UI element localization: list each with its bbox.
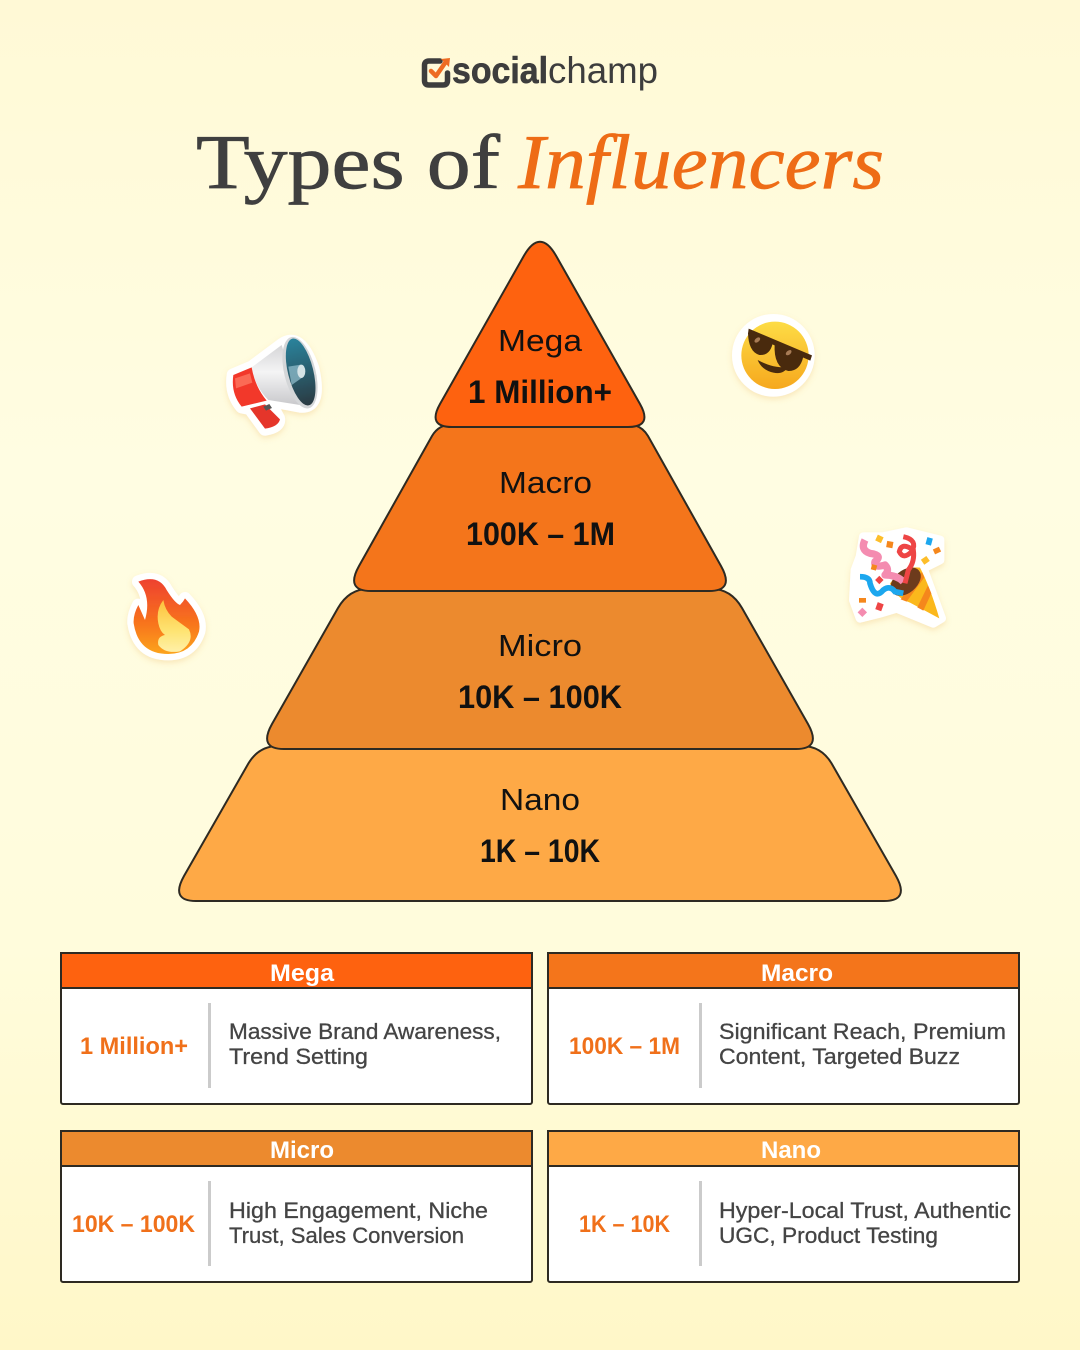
tier: Macro: Macro [499, 465, 592, 500]
logo wordmark: social [452, 50, 548, 91]
panel: Macro card [548, 953, 1019, 1104]
Mega card header [61, 953, 532, 988]
Micro description: High Engagement, Niche [229, 1198, 488, 1223]
Macro description: Content, Targeted Buzz [719, 1044, 960, 1069]
tier: Micro: Micro [498, 628, 582, 663]
tier: Mega [436, 242, 644, 427]
Mega description [229, 1019, 501, 1069]
logo wordmark light: champ [548, 50, 658, 91]
tier: Micro: 10K – 100K [458, 679, 622, 715]
Macro description [719, 1019, 1006, 1069]
tier: Mega: 1 Million+ [468, 374, 612, 410]
title part: Types of: Types of [196, 119, 500, 205]
Macro range: 100K – 1M [569, 1033, 680, 1060]
Macro card header [548, 953, 1019, 988]
tier: Macro [354, 424, 726, 591]
Mega description: Massive Brand Awareness, [229, 1019, 501, 1044]
Nano description: Hyper-Local Trust, Authentic [719, 1198, 1011, 1223]
Nano range: 1K – 10K [579, 1211, 671, 1238]
icon: fire emoji sticker [134, 579, 200, 654]
panel: Nano card [548, 1131, 1019, 1282]
panel: Micro card [61, 1131, 532, 1282]
tier: Nano [179, 746, 901, 901]
Macro card header: Macro [761, 960, 833, 987]
Mega card header: Mega [270, 960, 335, 987]
title part: Influencers: Influencers [517, 119, 884, 205]
tier: Micro [267, 589, 813, 749]
icon: logo check box [424, 58, 450, 85]
tier: Nano: 1K – 10K [480, 833, 600, 869]
pyramid chart [179, 242, 901, 901]
tier: Mega: Mega [498, 323, 583, 358]
tier: Macro: 100K – 1M [466, 516, 615, 552]
Micro description: Trust, Sales Conversion [229, 1223, 464, 1248]
icon: party popper sticker [853, 532, 942, 623]
title [196, 119, 884, 205]
tier: Nano: Nano [500, 782, 580, 817]
icon: megaphone sticker [233, 333, 324, 429]
Micro card header: Micro [270, 1137, 334, 1164]
Nano description: UGC, Product Testing [719, 1223, 938, 1248]
Mega description: Trend Setting [229, 1044, 368, 1069]
icon: sunglasses emoji sticker [732, 314, 815, 397]
logo: socialchamp [424, 50, 658, 91]
Nano card header: Nano [761, 1137, 821, 1164]
Nano card header [548, 1131, 1019, 1166]
Mega range: 1 Million+ [80, 1033, 188, 1060]
Micro description [229, 1198, 488, 1248]
Micro range: 10K – 100K [72, 1211, 196, 1238]
panel: Mega card [61, 953, 532, 1104]
Macro description: Significant Reach, Premium [719, 1019, 1006, 1044]
Nano description [719, 1198, 1011, 1248]
Micro card header [61, 1131, 532, 1166]
